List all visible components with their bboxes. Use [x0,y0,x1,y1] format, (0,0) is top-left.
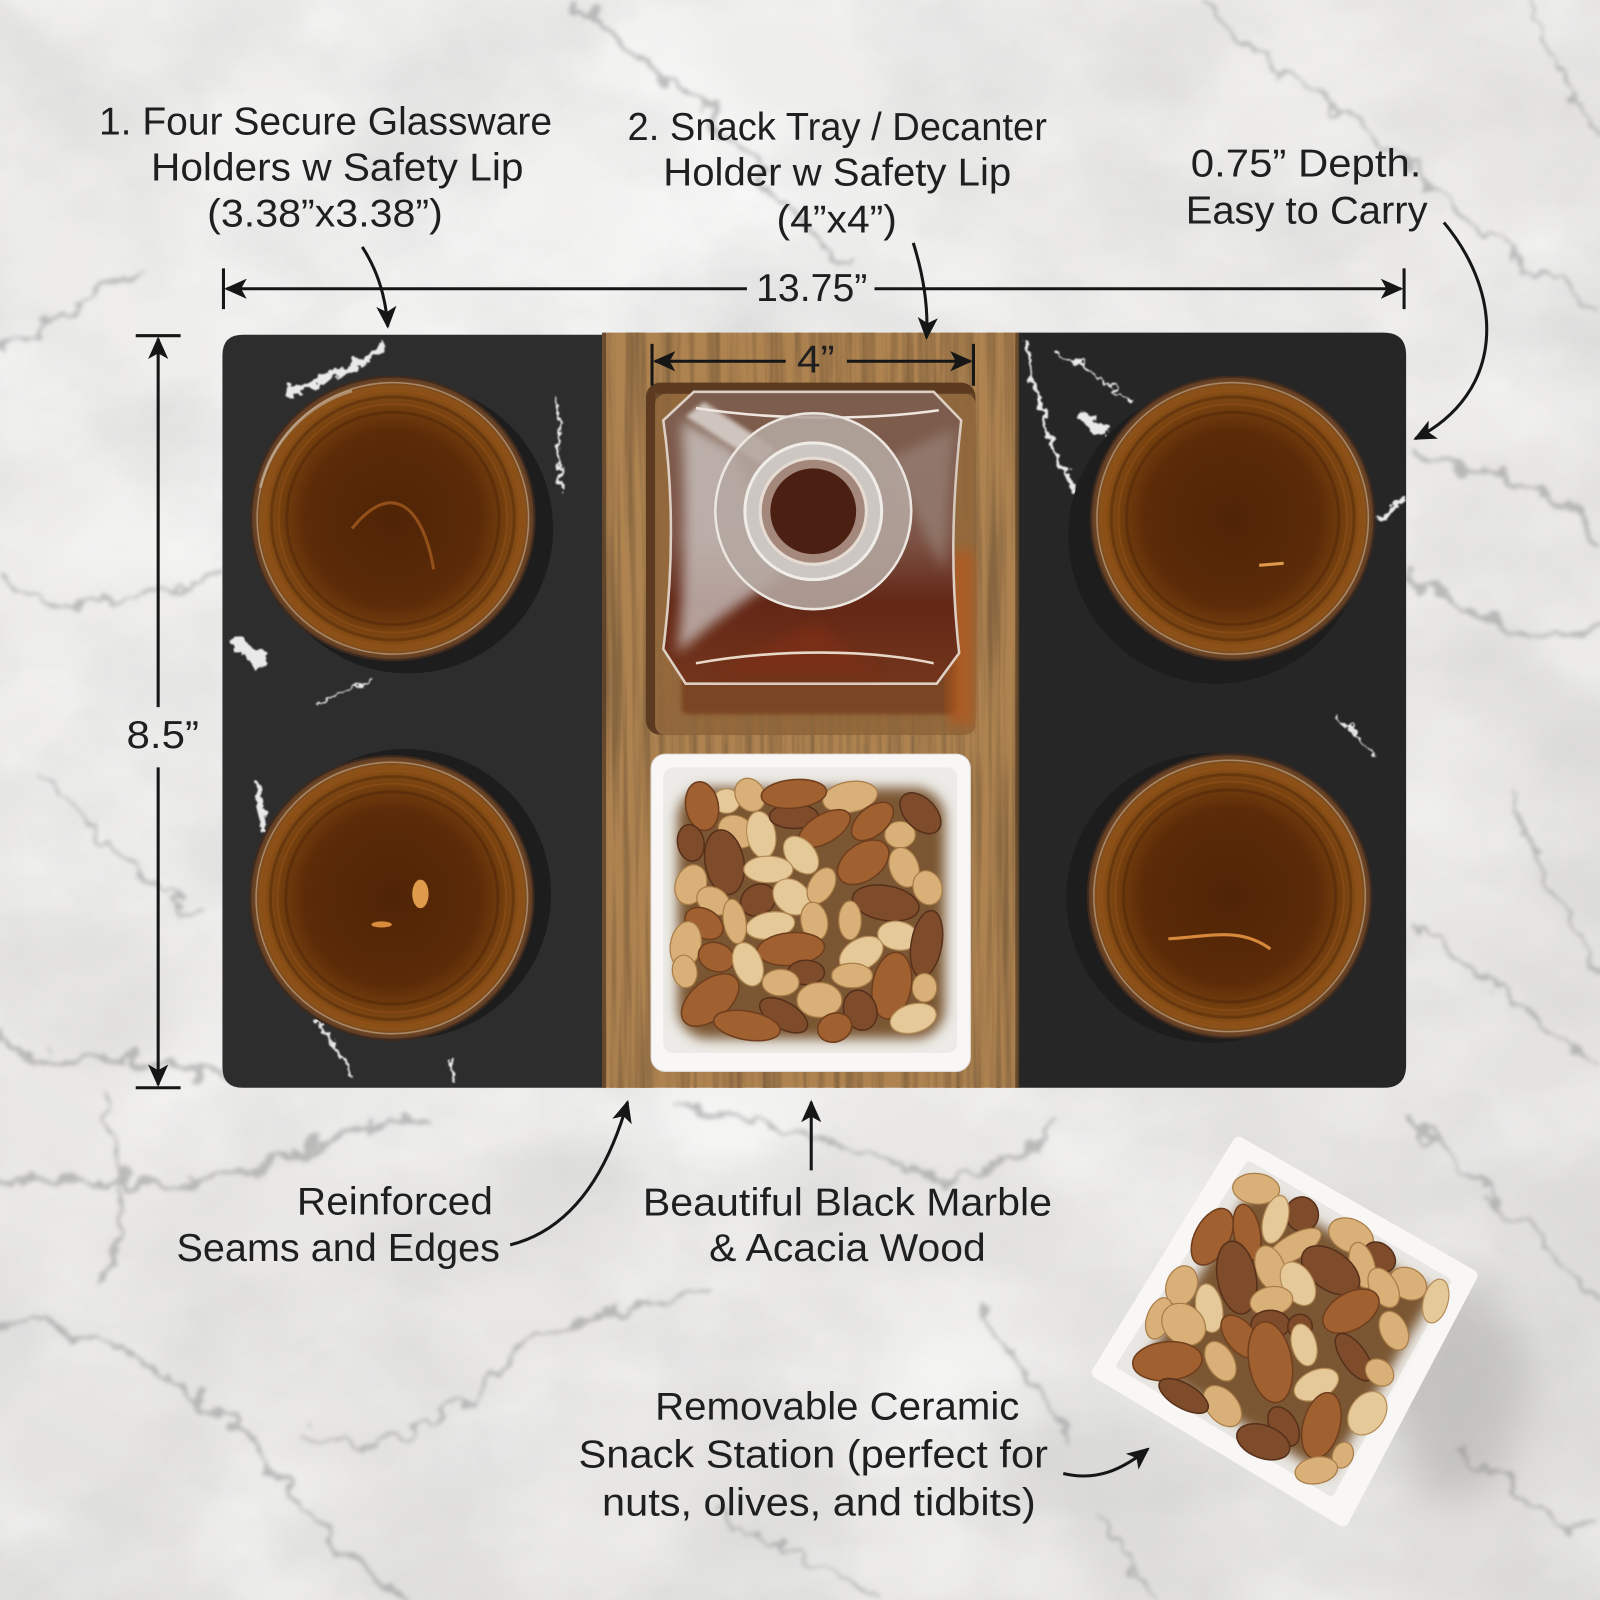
heading: glassware holders [99,101,552,236]
glass: bottom left [250,756,534,1040]
decanter recess [646,383,976,735]
removable ceramic bowl [1098,1143,1471,1520]
heading: snack tray [628,106,1047,242]
dimension: tray 4 inch [652,338,973,386]
label: ceramic snack station: Removable Ceramic [655,1385,1019,1428]
glass: top right [1091,377,1374,660]
nuts in removable bowl [1131,1171,1453,1487]
tray [222,333,1406,1088]
label: ceramic snack station [579,1385,1048,1524]
bowl shadow on marble [1383,1276,1526,1500]
glass: top left [251,377,535,660]
label: reinforced seams [177,1180,500,1270]
panel: acacia wood centre [602,333,1019,1088]
decanter neck [715,413,911,609]
label: ceramic snack station: nuts, olives, and tidbits) [602,1481,1036,1524]
panel: left black marble [222,335,602,1088]
panel: right black marble [1018,333,1406,1088]
dimension: height 8.5: 8.5” [127,714,199,757]
dimension: width 13.75 [223,267,1404,310]
heading: glassware holders: 1. Four Secure Glassware [99,101,552,144]
label: reinforced seams: Seams and Edges [177,1227,500,1270]
heading: snack tray: (4”x4”) [777,199,897,242]
arrow: seams [510,1102,628,1245]
label: ceramic snack station: Snack Station (perfect for [579,1433,1048,1476]
heading: glassware holders: (3.38”x3.38”) [207,193,443,236]
label: reinforced seams: Reinforced [297,1180,493,1223]
arrow: snack tray [913,243,927,338]
arrow: glassware holders [362,247,388,327]
dimension: width 13.75: 13.75” [756,267,867,310]
arrow: materials [810,1102,813,1170]
arrow: depth [1415,222,1487,439]
heading: depth [1186,143,1428,232]
decanter [663,392,973,724]
label: materials: Beautiful Black Marble [643,1181,1052,1224]
heading: snack tray: Holder w Safety Lip [663,152,1011,195]
dimension: height 8.5 [127,336,199,1088]
glass holder recesses [261,384,1364,1043]
glass: bottom right [1088,754,1371,1038]
arrow: ceramic station [1063,1449,1148,1476]
heading: depth: Easy to Carry [1186,189,1428,232]
heading: depth: 0.75” Depth. [1191,143,1421,186]
ceramic bowl in tray [651,754,970,1071]
dimension: tray 4 inch: 4” [797,338,835,381]
label: materials [643,1181,1052,1270]
label: materials: & Acacia Wood [709,1227,986,1270]
heading: glassware holders: Holders w Safety Lip [151,147,523,190]
heading: snack tray: 2. Snack Tray / Decanter [628,106,1047,149]
nuts in tray bowl [667,773,949,1047]
